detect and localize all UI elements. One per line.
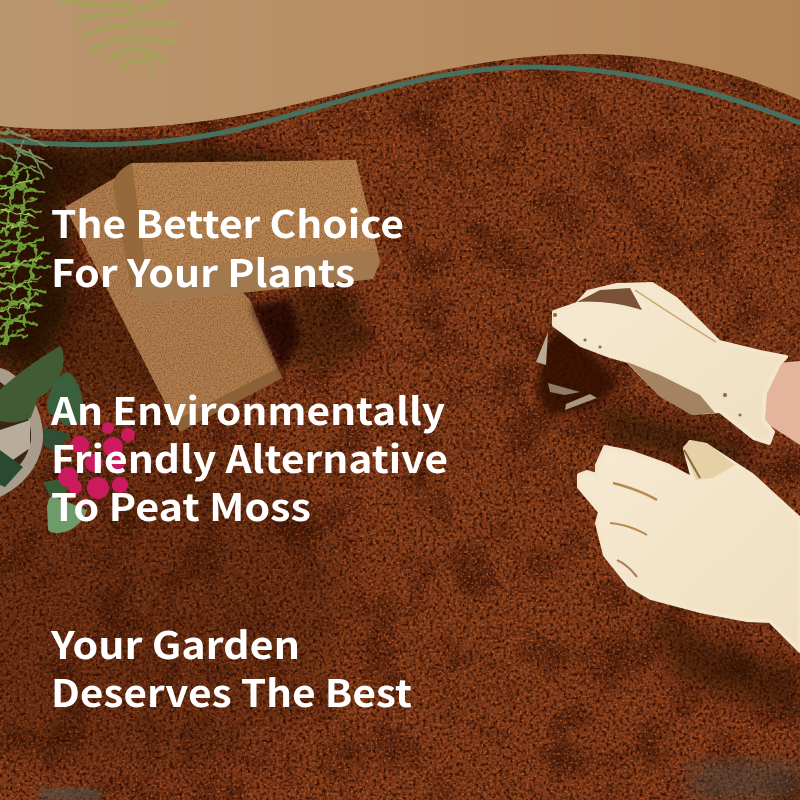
- heading: An Environmentally Friendly Alternative To Peat Moss: To Peat Moss: [51, 477, 311, 532]
- gloved upper hand: [536, 284, 800, 445]
- arm: [761, 361, 800, 445]
- potted plant with pink flowers: [0, 347, 135, 533]
- heading: The Better Choice For Your Plants: The Better Choice: [51, 194, 404, 249]
- heading: Your Garden Deserves The Best: [50, 615, 412, 718]
- leaves: [0, 347, 63, 421]
- green wave line: [0, 67, 800, 145]
- heading: The Better Choice For Your Plants: [51, 194, 404, 298]
- heading: An Environmentally Friendly Alternative To Peat Moss: An Environmentally: [50, 381, 446, 436]
- pot: [0, 368, 43, 497]
- top beige wave panel: [0, 0, 800, 129]
- icon: fern plant left: [0, 130, 52, 345]
- gloved lower hand: [579, 440, 800, 651]
- flower cluster: [58, 422, 135, 506]
- heading: An Environmentally Friendly Alternative To Peat Moss: Friendly Alternative: [51, 429, 448, 484]
- glove: [554, 284, 786, 443]
- upper coir brick: [113, 160, 380, 302]
- heading: Your Garden Deserves The Best: Your Garden: [50, 615, 300, 670]
- soil mound under finger: [537, 330, 620, 415]
- icon: faded fern: [60, 0, 178, 72]
- heading: The Better Choice For Your Plants: For Your Plants: [51, 243, 355, 298]
- heading: An Environmentally Friendly Alternative To Peat Moss: [50, 381, 448, 532]
- bricks of coir: [65, 160, 380, 432]
- lower coir brick: [65, 178, 282, 432]
- heading: Your Garden Deserves The Best: Deserves The Best: [51, 663, 412, 718]
